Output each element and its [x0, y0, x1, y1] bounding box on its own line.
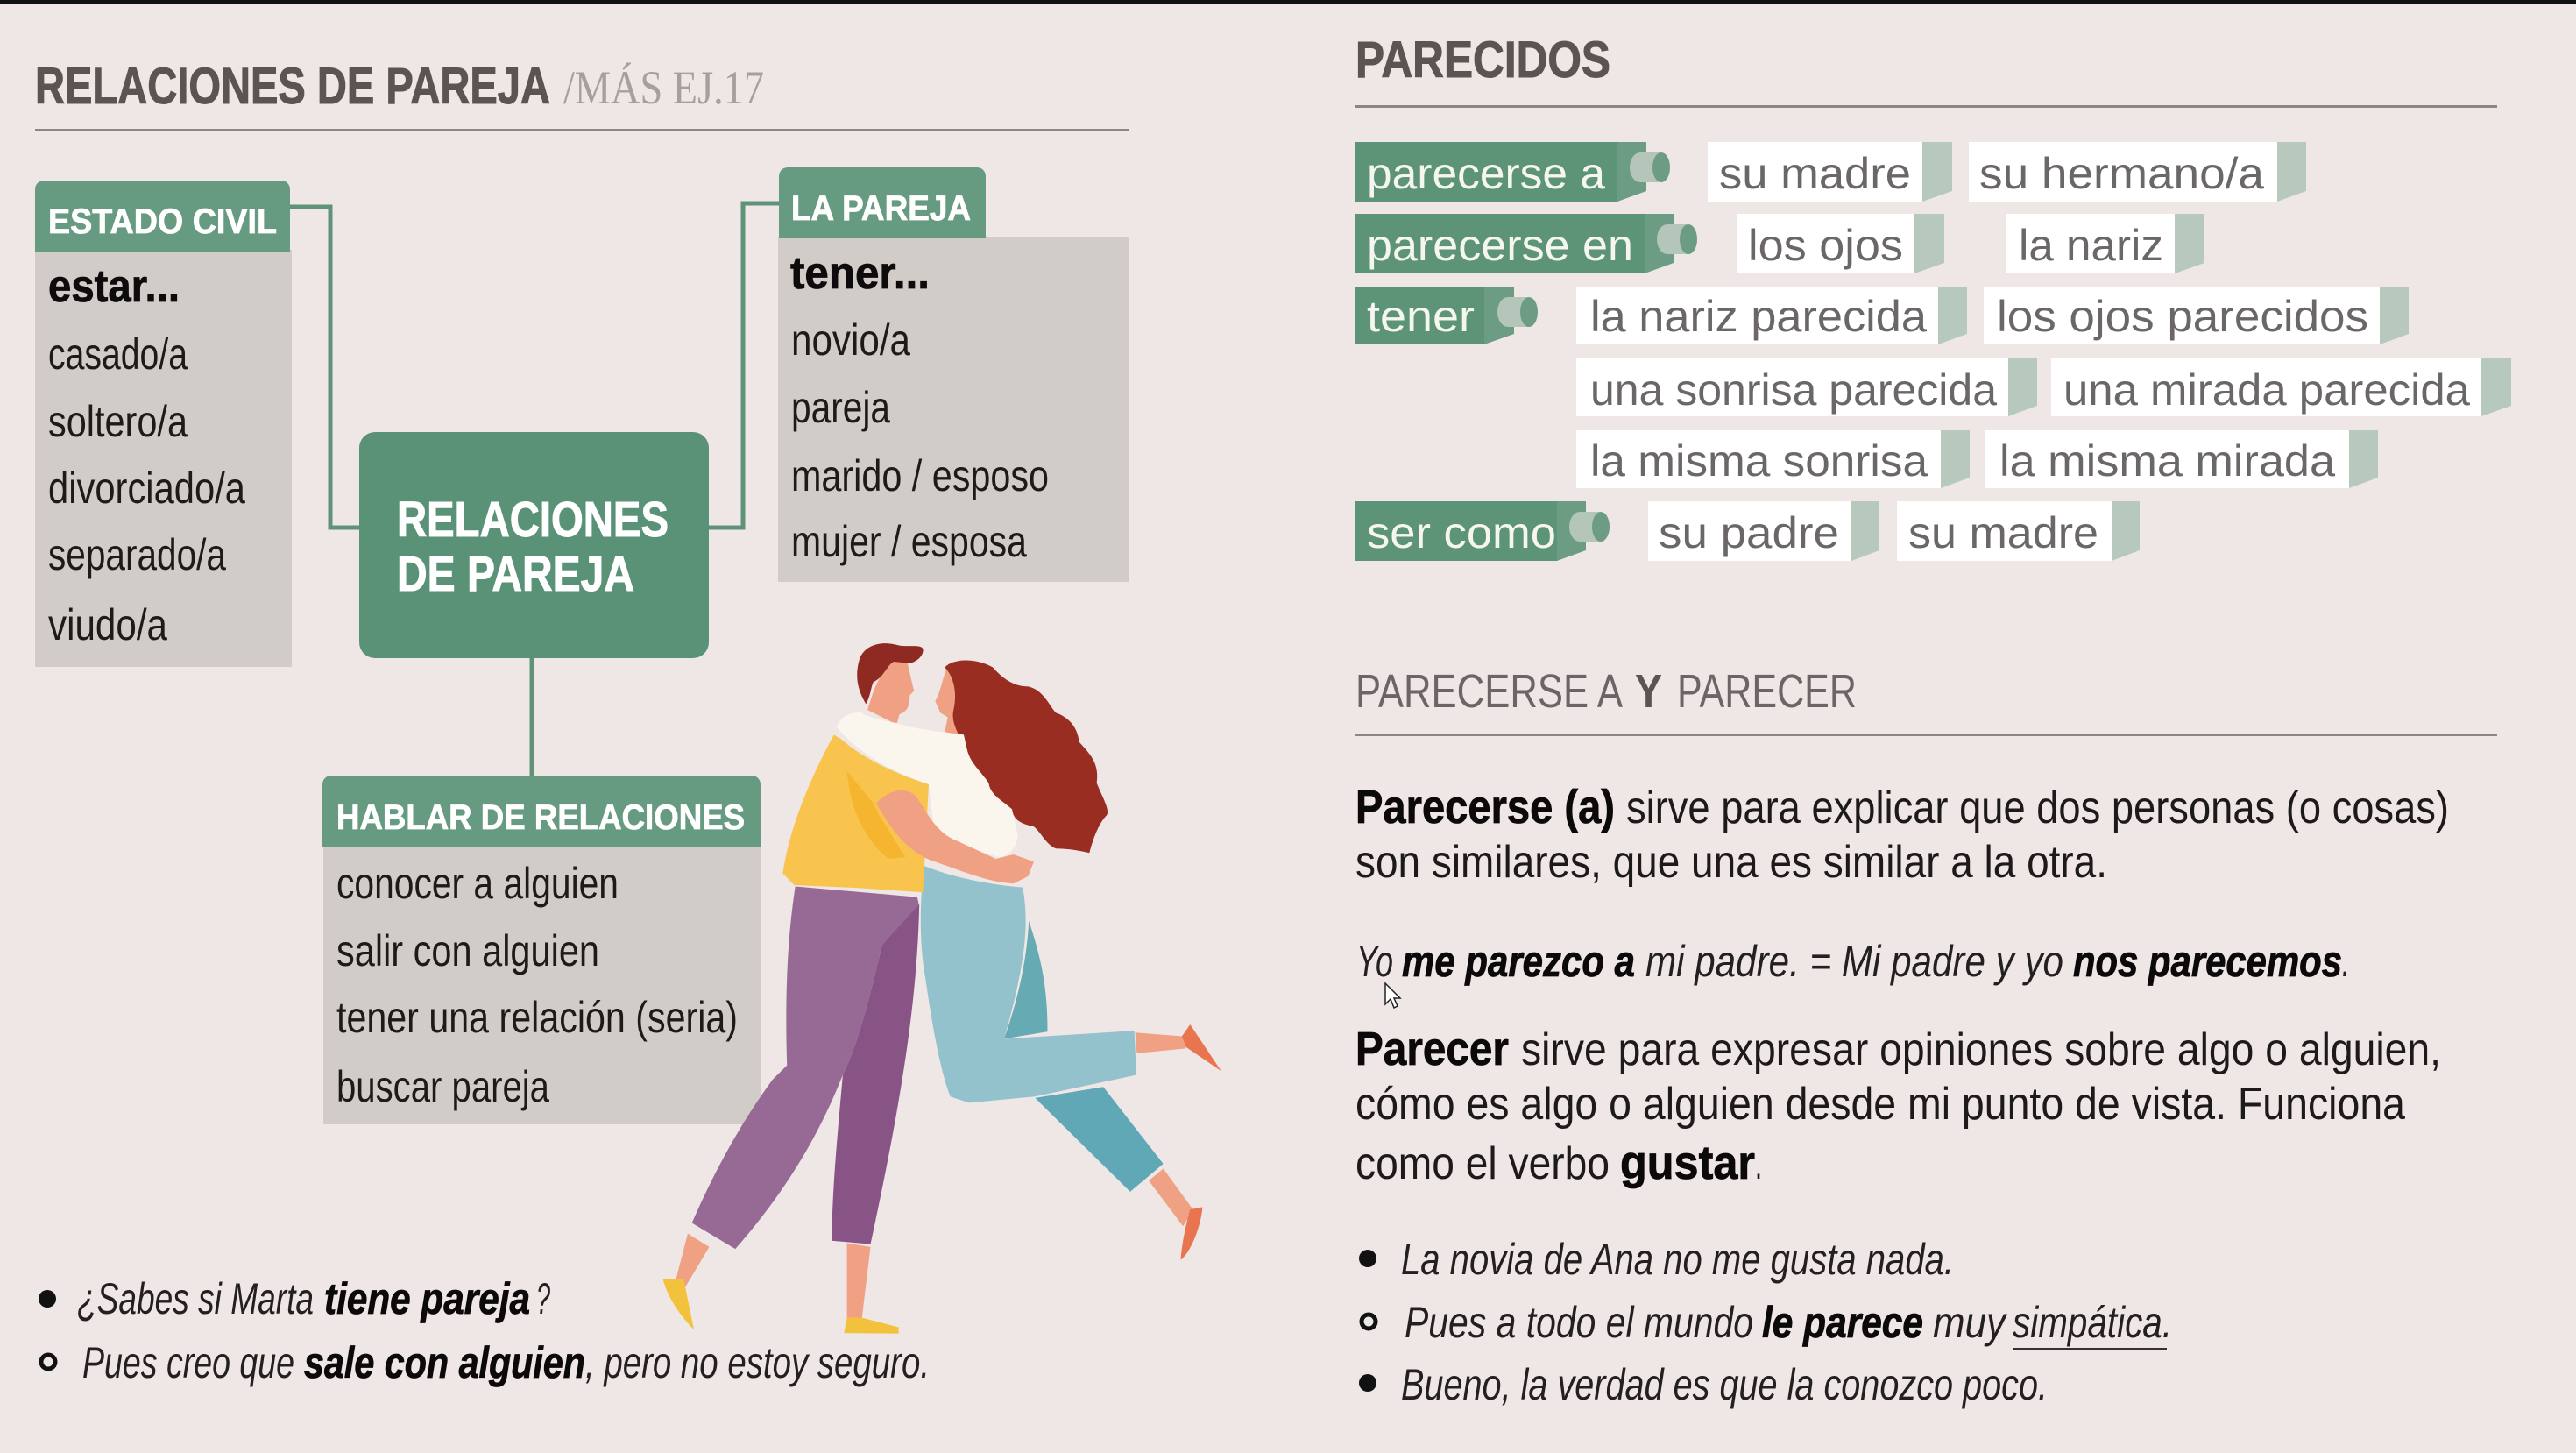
chip: la nariz parecida — [1576, 287, 1967, 344]
chip: los ojos: los ojos — [1748, 221, 1903, 270]
example dialogue: right: muy — [1933, 1298, 2008, 1347]
header: hablar de relaciones: HABLAR DE RELACIONES — [336, 798, 745, 837]
chip: su padre: su padre — [1659, 508, 1839, 557]
example dialogue: right: La novia de Ana no me gusta nada. — [1401, 1235, 1954, 1284]
chip: los ojos — [1737, 214, 1944, 273]
example dialogue: right: le parece — [1762, 1298, 1923, 1347]
panel: la pareja: pareja — [791, 383, 890, 432]
example dialogue: right: Bueno, la verdad es que la conozco poco. — [1401, 1360, 2048, 1409]
example dialogue: left: Pues creo que — [82, 1338, 294, 1387]
panel: la pareja: novio/a — [791, 315, 910, 365]
header: estado civil: ESTADO CIVIL — [48, 202, 277, 241]
example dialogue: right: Pues a todo el mundo — [1405, 1298, 1753, 1347]
connectors: mind map lines — [290, 203, 779, 776]
text block: parecer: como el verbo — [1355, 1138, 1610, 1189]
panel: la pareja — [778, 167, 1129, 582]
header: la pareja — [779, 167, 986, 238]
example dialogue: left: tiene pareja — [324, 1274, 530, 1323]
text block: parecer: cómo es algo o alguien desde mi punto de vista. Funciona — [1355, 1079, 2405, 1130]
text block: parecerse (a): sirve para explicar que dos personas (o cosas) — [1626, 783, 2449, 833]
panel: hablar de relaciones: salir con alguien — [336, 926, 599, 975]
panel: la pareja: mujer / esposa — [791, 517, 1027, 566]
panel: estado civil: separado/a — [48, 530, 226, 579]
heading: parecidos: PARECIDOS — [1355, 32, 1610, 89]
vocabulary chips: parecidos — [1355, 142, 2511, 561]
chip: su padre — [1648, 501, 1879, 561]
chip: la nariz parecida: la nariz parecida — [1590, 292, 1927, 341]
heading: relaciones de pareja: /MÁS EJ.17 — [563, 61, 764, 114]
text block: parecer: gustar — [1620, 1137, 1755, 1189]
heading: relaciones de pareja: RELACIONES DE PAREJA — [35, 58, 550, 115]
chip: la misma mirada — [1985, 430, 2378, 488]
panel: estado civil: soltero/a — [48, 397, 188, 446]
chip: tener: tener — [1367, 292, 1475, 341]
chip: su madre (2): su madre — [1908, 508, 2098, 557]
example sentence: Yo — [1356, 937, 1393, 986]
chip: parecerse a — [1355, 142, 1670, 202]
chip: la nariz — [2006, 214, 2204, 273]
example dialogue: left: , pero no estoy seguro. — [585, 1338, 930, 1387]
chip: la misma mirada: la misma mirada — [1999, 436, 2335, 486]
header: la pareja: LA PAREJA — [791, 189, 971, 228]
panel: la pareja: marido / esposo — [791, 451, 1049, 500]
example dialogue: left: ? — [536, 1274, 550, 1323]
panel: hablar de relaciones — [322, 776, 761, 1124]
central box: relaciones de pareja: DE PAREJA — [397, 546, 634, 602]
panel: estado civil: estar... — [48, 261, 180, 312]
chip: los ojos parecidos: los ojos parecidos — [1997, 292, 2368, 341]
chip: ser como: ser como — [1367, 508, 1556, 557]
chip: tener — [1355, 287, 1538, 344]
text block: parecerse (a): son similares, que una es similar a la otra. — [1355, 837, 2107, 888]
header: hablar de relaciones — [322, 776, 761, 847]
text block: parecerse (a) — [1355, 781, 2449, 888]
chip: su madre — [1708, 142, 1952, 202]
panel: hablar de relaciones: buscar pareja — [336, 1062, 549, 1111]
panel: hablar de relaciones: conocer a alguien — [336, 859, 619, 908]
chip: parecerse en: parecerse en — [1367, 221, 1633, 270]
panel: la pareja: tener... — [790, 248, 930, 299]
example dialogue: left: sale con alguien — [304, 1338, 585, 1387]
panel: estado civil — [35, 181, 292, 667]
example dialogue: left: ¿Sabes si Marta — [77, 1274, 314, 1323]
heading: parecerse a y parecer: PARECER — [1677, 665, 1857, 718]
chip: una sonrisa parecida: una sonrisa parecida — [1590, 365, 1997, 415]
panel: hablar de relaciones: tener una relación (seria) — [336, 993, 738, 1042]
central box: relaciones de pareja: RELACIONES — [397, 492, 669, 548]
example dialogue: right — [1359, 1235, 2172, 1409]
text block: parecerse (a): Parecerse (a) — [1355, 781, 1615, 833]
example sentence: me parezco a — [1402, 937, 1635, 986]
panel: estado civil: viudo/a — [48, 600, 167, 649]
example sentence: . — [2342, 937, 2349, 986]
text block: parecer: Parecer — [1355, 1023, 1509, 1075]
panel: estado civil: casado/a — [48, 330, 188, 379]
central box: relaciones de pareja — [359, 432, 709, 658]
text block: parecer: . — [1755, 1138, 1762, 1189]
heading: parecerse a y parecer — [1355, 665, 1857, 718]
chip: una mirada parecida: una mirada parecida — [2063, 365, 2470, 415]
chip: su hermano/a — [1969, 142, 2306, 202]
icon: mouse cursor — [1385, 983, 1400, 1008]
text block: parecer: sirve para expresar opiniones sobre algo o alguien, — [1521, 1024, 2441, 1075]
illustration: couple hugging — [663, 643, 1221, 1334]
chip: su madre: su madre — [1719, 149, 1911, 198]
chip: parecerse en — [1355, 214, 1697, 273]
example dialogue: left — [39, 1274, 930, 1387]
chip: su hermano/a: su hermano/a — [1979, 149, 2264, 198]
text block: parecer — [1355, 1023, 2441, 1189]
chip: su madre (2) — [1897, 501, 2140, 561]
example sentence — [1356, 937, 2349, 986]
example dialogue: right: simpática. — [2013, 1298, 2172, 1347]
example sentence: mi padre. = Mi padre y yo — [1645, 937, 2063, 986]
chip: la misma sonrisa: la misma sonrisa — [1590, 436, 1928, 486]
chip: la nariz: la nariz — [2019, 221, 2163, 270]
header: estado civil — [35, 181, 290, 252]
example sentence: nos parecemos — [2073, 937, 2342, 986]
chip: ser como — [1355, 501, 1610, 561]
chip: parecerse a: parecerse a — [1367, 149, 1605, 198]
panel: estado civil: divorciado/a — [48, 464, 245, 513]
heading: parecerse a y parecer: Y — [1635, 665, 1662, 718]
heading: parecerse a y parecer: PARECERSE A — [1355, 665, 1623, 718]
